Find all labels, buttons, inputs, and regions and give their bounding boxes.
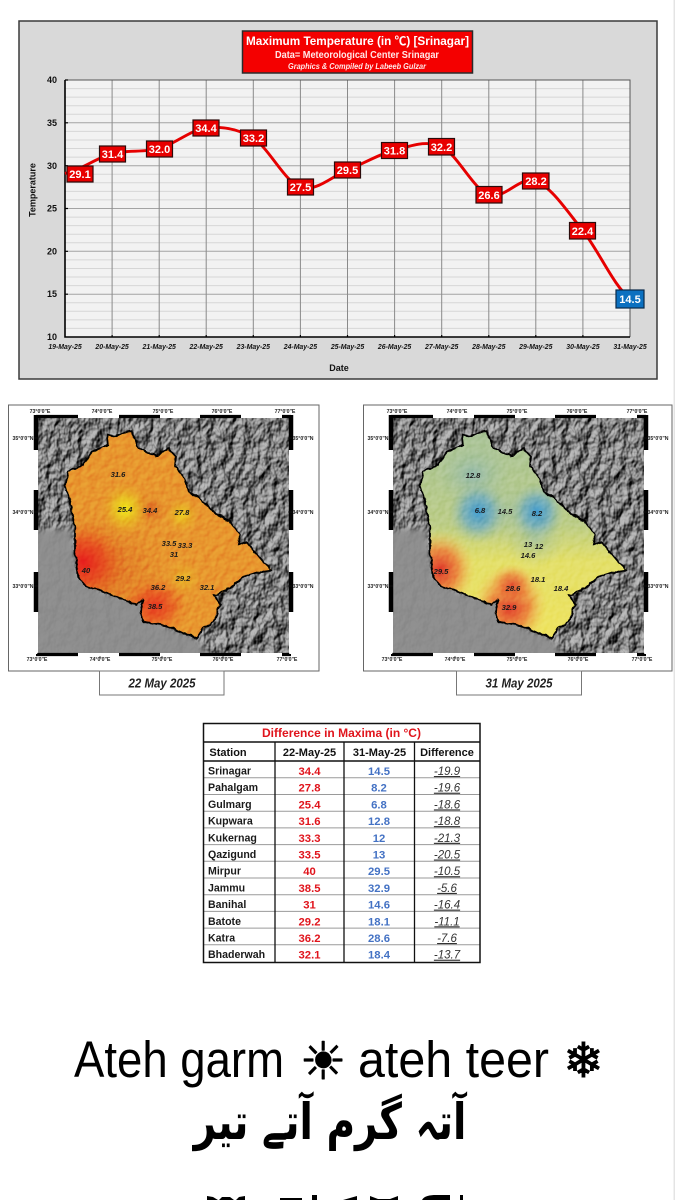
region border <box>420 431 627 638</box>
data labels: 33.2 <box>243 133 264 145</box>
chart background panel <box>19 21 657 379</box>
data labels: 32.2 <box>431 142 452 154</box>
table rows: Bhaderwah <box>208 949 265 961</box>
data labels <box>67 120 644 308</box>
station values: 29.2 <box>175 574 191 583</box>
data labels: 28.2 <box>525 176 547 188</box>
coordinate labels <box>12 409 314 663</box>
table rows: 33.3 <box>298 833 320 845</box>
y axis labels: 30 <box>47 161 57 171</box>
x axis date labels: 31-May-25 <box>613 344 647 351</box>
table rows: -16.4 <box>434 900 460 912</box>
table rows: 29.2 <box>298 916 320 928</box>
x axis date labels: 29-May-25 <box>518 344 553 351</box>
station values: 12.8 <box>466 471 481 480</box>
caption: 31 May 2025 <box>456 671 582 695</box>
table rows: 18.1 <box>368 916 390 928</box>
station values: 28.6 <box>505 584 521 593</box>
table rows: -21.3 <box>434 833 461 845</box>
coordinate labels: 77°0'0"E <box>275 409 296 415</box>
station values: 13 <box>524 540 533 549</box>
data labels: 32.0 <box>149 144 170 156</box>
table title: Difference in Maxima (in °C) <box>262 726 421 740</box>
table rows: 12 <box>373 833 385 845</box>
y axis labels: 35 <box>47 118 57 128</box>
caption: 31 May 2025: 31 May 2025 <box>486 676 553 690</box>
headline: Ateh garm ateh teer: ateh teer <box>358 1031 549 1088</box>
y axis title: Temperature <box>28 163 38 217</box>
data labels: 31.8 <box>384 146 405 158</box>
y axis labels <box>47 75 57 342</box>
x axis date labels: 23-May-25 <box>236 344 270 351</box>
page edge strip <box>674 0 675 1200</box>
plot area <box>65 80 630 337</box>
station values: 14.6 <box>521 551 536 560</box>
x axis date labels: 25-May-25 <box>330 344 364 351</box>
icon: snowflake: ❄ <box>563 1033 604 1089</box>
coordinate labels: 34°0'0"N <box>647 510 669 516</box>
coordinate labels: 75°0'0"E <box>507 409 528 415</box>
table header: Difference <box>420 747 474 759</box>
coordinate labels: 34°0'0"N <box>367 510 389 516</box>
station values: 12 <box>535 542 544 551</box>
x axis date labels: 24-May-25 <box>283 344 317 351</box>
y axis labels: 20 <box>47 246 57 256</box>
hillshade terrain <box>375 418 644 670</box>
station values: 34.4 <box>143 506 158 515</box>
station values <box>81 470 214 611</box>
coordinate labels: 76°0'0"E <box>213 657 234 663</box>
table header: Station <box>209 747 247 759</box>
table rows: 13 <box>373 850 385 862</box>
table rows: Kupwara <box>208 816 253 828</box>
coordinate labels: 74°0'0"E <box>92 409 113 415</box>
x axis date labels: 22-May-25 <box>189 344 223 351</box>
table header: 31-May-25 <box>353 747 406 759</box>
table rows: -19.9 <box>434 766 461 778</box>
coordinate labels: 33°0'0"N <box>12 584 34 590</box>
station values <box>433 471 569 612</box>
station values: 27.8 <box>174 508 190 517</box>
table rows: 29.5 <box>368 866 390 878</box>
station values: 40 <box>81 566 91 575</box>
hillshade terrain <box>20 418 289 670</box>
table rows: Srinagar <box>208 766 251 778</box>
caption: 22 May 2025 <box>100 671 224 695</box>
data labels: 14.5 <box>619 294 641 306</box>
station values: 38.5 <box>148 602 163 611</box>
table header <box>209 747 474 759</box>
table rows: -13.7 <box>434 950 461 962</box>
station values: 29.5 <box>433 567 449 576</box>
coordinate labels <box>367 409 669 663</box>
third line cropped at page edge (illegible fragments) <box>207 1195 463 1200</box>
station values: 33.3 <box>178 541 193 550</box>
x axis date labels: 26-May-25 <box>377 344 411 351</box>
station values: 31 <box>170 550 178 559</box>
table rows: 14.5 <box>368 766 390 778</box>
y axis labels: 40 <box>47 75 57 85</box>
table header: 22-May-25 <box>283 747 336 759</box>
data labels: 29.5 <box>337 165 358 177</box>
frame ticks <box>34 415 292 659</box>
chart title box: Maximum Temperature (in ℃) [Srinagar] <box>246 34 469 48</box>
coordinate labels: 34°0'0"N <box>292 510 314 516</box>
data labels: 22.4 <box>572 226 594 238</box>
table rows: Pahalgam <box>208 782 258 794</box>
x axis date labels: 19-May-25 <box>48 344 82 351</box>
coordinate labels: 75°0'0"E <box>507 657 528 663</box>
x axis date labels: 28-May-25 <box>471 344 506 351</box>
data labels: 29.1 <box>69 169 91 181</box>
table rows: -18.6 <box>434 799 461 811</box>
coordinate labels: 73°0'0"E <box>382 657 403 663</box>
station values: 25.4 <box>117 505 133 514</box>
coordinate labels: 34°0'0"N <box>12 510 34 516</box>
table rows: 27.8 <box>298 783 320 795</box>
table rows: 31 <box>303 900 316 912</box>
data labels: 26.6 <box>478 190 500 202</box>
caption: 22 May 2025: 22 May 2025 <box>128 676 196 690</box>
y axis labels: 15 <box>47 289 57 299</box>
coordinate labels: 75°0'0"E <box>152 657 173 663</box>
x axis title: Date <box>329 363 349 373</box>
table rows: 34.4 <box>298 766 321 778</box>
table rows: -20.5 <box>434 850 461 862</box>
y axis labels: 10 <box>47 332 57 342</box>
station values: 32.9 <box>502 603 517 612</box>
table rows: 36.2 <box>298 933 320 945</box>
coordinate labels: 77°0'0"E <box>277 657 298 663</box>
station values: 18.1 <box>531 575 545 584</box>
station values: 8.2 <box>532 509 543 518</box>
station values: 18.4 <box>554 584 569 593</box>
panel: map 31 May 2025 <box>364 405 672 671</box>
table rows: Gulmarg <box>208 799 252 811</box>
x axis date labels: 30-May-25 <box>566 344 600 351</box>
table rows: 12.8 <box>368 816 390 828</box>
station values: 36.2 <box>151 583 166 592</box>
table rows: -5.6 <box>437 883 458 895</box>
coordinate labels: 73°0'0"E <box>387 409 408 415</box>
panel: map 22 May 2025 <box>8 405 319 671</box>
chart title box: Graphics & Compiled by Labeeb Gulzar <box>288 62 427 71</box>
frame ticks <box>389 415 647 659</box>
Urdu headline: آتہ گرم آتے تیر <box>192 1091 468 1151</box>
table: difference in maxima <box>204 724 480 962</box>
table rows: 14.6 <box>368 900 390 912</box>
coordinate labels: 73°0'0"E <box>27 657 48 663</box>
station values: 31.6 <box>111 470 126 479</box>
headline: Ateh garm ateh teer <box>74 1031 604 1092</box>
coordinate labels: 74°0'0"E <box>445 657 466 663</box>
table rows: -19.6 <box>434 783 461 795</box>
table rows: -10.5 <box>434 866 461 878</box>
temperature heat field <box>65 432 272 637</box>
coordinate labels: 35°0'0"N <box>647 436 669 442</box>
table rows: 40 <box>303 866 316 878</box>
coordinate labels: 74°0'0"E <box>447 409 468 415</box>
table rows: Batote <box>208 916 241 928</box>
temperature line <box>65 127 630 298</box>
coordinate labels: 33°0'0"N <box>292 584 314 590</box>
table rows: 28.6 <box>368 933 390 945</box>
table rows: Qazigund <box>208 849 256 861</box>
table rows: 8.2 <box>371 783 387 795</box>
station values: 6.8 <box>475 506 486 515</box>
station values: 14.5 <box>498 507 513 516</box>
table rows: Katra <box>208 932 235 944</box>
table rows: Banihal <box>208 899 246 911</box>
table rows: 32.9 <box>368 883 390 895</box>
x axis date labels <box>48 344 647 351</box>
region border <box>65 431 272 638</box>
coordinate labels: 35°0'0"N <box>12 436 34 442</box>
data labels: 34.4 <box>195 123 218 135</box>
y axis labels: 25 <box>47 204 57 214</box>
table rows: -11.1 <box>434 916 460 928</box>
data labels: 31.4 <box>102 149 124 161</box>
table rows <box>208 766 461 962</box>
table rows: -18.8 <box>434 816 461 828</box>
table rows: 38.5 <box>298 883 320 895</box>
coordinate labels: 76°0'0"E <box>567 409 588 415</box>
coordinate labels: 35°0'0"N <box>367 436 389 442</box>
table rows: Kukernag <box>208 832 257 844</box>
coordinate labels: 76°0'0"E <box>212 409 233 415</box>
coordinate labels: 75°0'0"E <box>153 409 174 415</box>
table rows: 32.1 <box>298 950 320 962</box>
data labels: 27.5 <box>290 182 311 194</box>
coordinate labels: 77°0'0"E <box>632 657 653 663</box>
table rows: 18.4 <box>368 950 391 962</box>
map frame <box>364 405 672 671</box>
table rows: 31.6 <box>298 816 320 828</box>
table rows: 6.8 <box>371 799 387 811</box>
x axis date labels: 27-May-25 <box>424 344 459 351</box>
table rows: 33.5 <box>298 850 320 862</box>
coordinate labels: 33°0'0"N <box>647 584 669 590</box>
coordinate labels: 77°0'0"E <box>627 409 648 415</box>
station values: 32.1 <box>200 583 214 592</box>
table rows: 25.4 <box>298 799 321 811</box>
station values: 33.5 <box>162 539 177 548</box>
chart title box: Data= Meteorological Center Srinagar <box>275 50 439 61</box>
coordinate labels: 33°0'0"N <box>367 584 389 590</box>
coordinate labels: 74°0'0"E <box>90 657 111 663</box>
table rows: -7.6 <box>437 933 458 945</box>
x axis date labels: 21-May-25 <box>142 344 176 351</box>
x axis date labels: 20-May-25 <box>94 344 129 351</box>
coordinate labels: 73°0'0"E <box>30 409 51 415</box>
coordinate labels: 35°0'0"N <box>292 436 314 442</box>
panel: line chart of maximum temperature <box>19 21 657 379</box>
temperature field <box>420 432 626 637</box>
map frame <box>8 405 319 671</box>
chart title box <box>242 31 472 73</box>
icon: sun: ☀ <box>300 1032 346 1092</box>
coordinate labels: 76°0'0"E <box>568 657 589 663</box>
headline: Ateh garm ateh teer: Ateh garm <box>74 1031 284 1088</box>
table rows: Mirpur <box>208 866 241 878</box>
table rows: Jammu <box>208 882 245 894</box>
